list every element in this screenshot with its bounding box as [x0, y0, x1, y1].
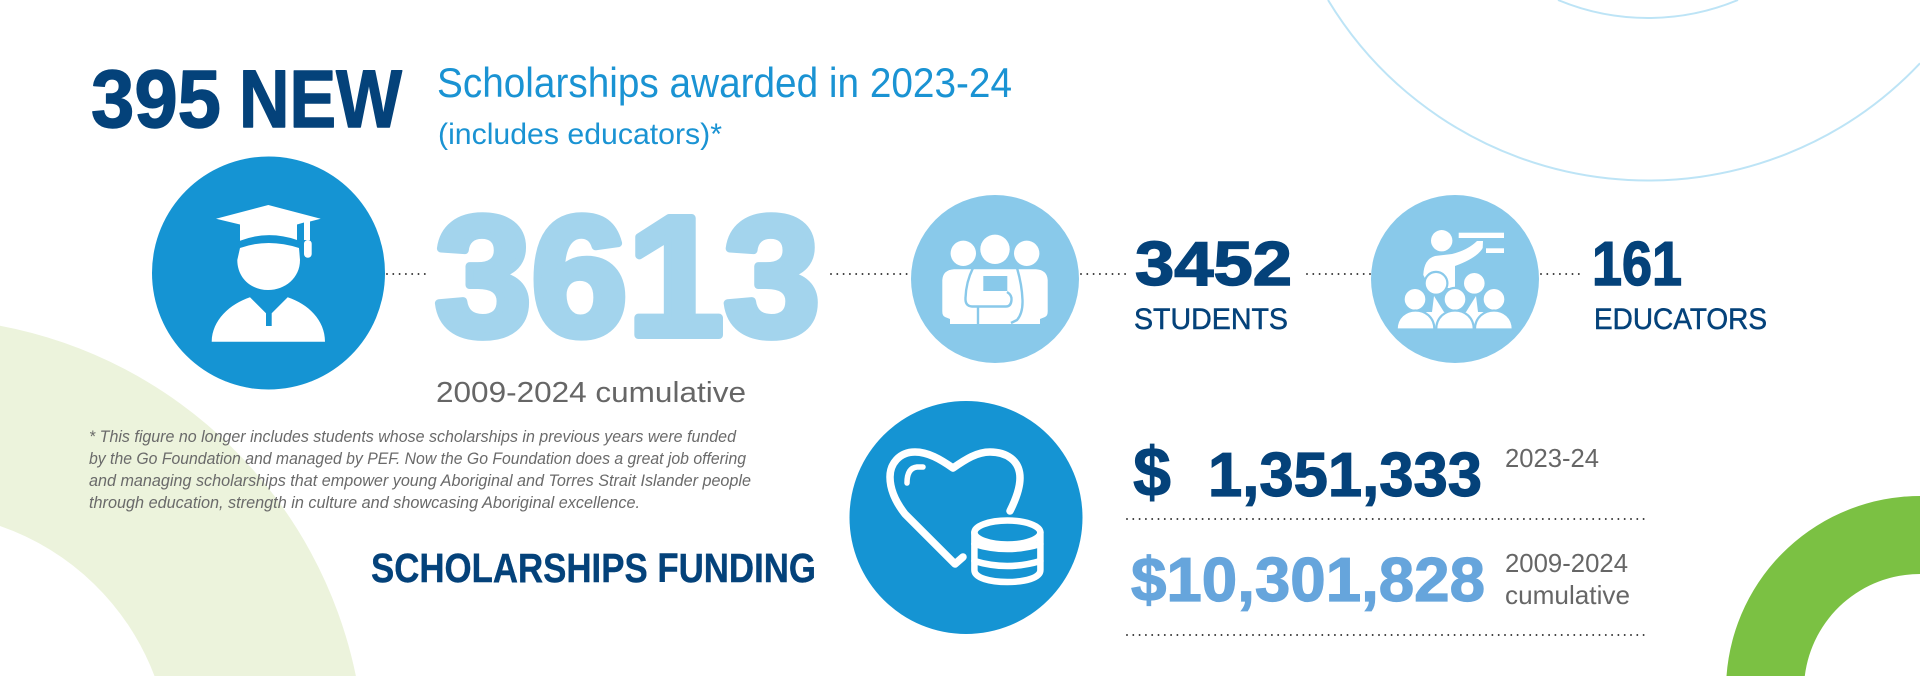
connector dots: [387, 273, 431, 275]
subheading: scholarships awarded: [437, 59, 1012, 151]
footnote: by the Go Foundation and managed by PEF. Now the Go Foundation does a great job offering: [89, 450, 747, 468]
divider dots: [1127, 518, 1648, 520]
connector dots: [1541, 273, 1582, 275]
stat: 3452 students: STUDENTS: [1134, 303, 1288, 336]
footnote: [89, 428, 751, 512]
stat: 161 educators: [1592, 230, 1767, 336]
funding figure: cumulative: cumulative: [1505, 580, 1630, 610]
caption: cumulative: 2009-2024 cumulative: [436, 377, 746, 409]
heading: 395 new: [91, 54, 403, 145]
connector dots: [1081, 273, 1130, 275]
icon: teacher and class in light blue circle: [1371, 195, 1539, 363]
stat: 3452 students: 3452: [1135, 230, 1292, 299]
icon: heart and coins in blue circle: [850, 401, 1082, 634]
subheading: scholarships awarded: (includes educators)*: [438, 118, 722, 151]
funding figure: 2023-24: [1133, 433, 1599, 511]
footnote: and managing scholarships that empower young Aboriginal and Torres Strait Islander people: [89, 472, 751, 490]
decorative pale green arc: [0, 326, 356, 676]
decorative thin blue arcs: [1328, 0, 1920, 181]
decorative green arc: [1726, 496, 1920, 676]
footnote: through education, strength in culture and showcasing Aboriginal excellence.: [89, 494, 640, 512]
icon: graduate in blue circle: [152, 156, 385, 390]
connector dots: [831, 273, 910, 275]
heading: 395 new: NEW: [239, 54, 403, 145]
subheading: scholarships awarded: Scholarships awarded in 2023-24: [437, 59, 1012, 106]
stat: 161 educators: EDUCATORS: [1594, 303, 1767, 336]
divider dots: [1127, 634, 1648, 636]
stat: 3452 students: [1134, 230, 1292, 336]
stat: 161 educators: 161: [1592, 230, 1682, 299]
footnote: * This figure no longer includes students whose scholarships in previous years were funded: [89, 428, 737, 446]
heading: scholarships funding: SCHOLARSHIPS FUNDING: [371, 545, 816, 591]
icon: students group in light blue circle: [911, 195, 1079, 363]
funding figure: 2023-24: $: [1133, 433, 1171, 511]
funding figure: cumulative: $10,301,828: [1131, 546, 1485, 615]
big number 3613: 3613: [435, 182, 820, 372]
heading: 395 new: 395: [91, 54, 221, 145]
connector dots: [1307, 273, 1371, 275]
funding figure: 2023-24: 1,351,333: [1208, 441, 1482, 510]
funding figure: cumulative: [1131, 546, 1630, 615]
funding figure: 2023-24: 2023-24: [1505, 443, 1599, 473]
funding figure: cumulative: 2009-2024: [1505, 548, 1628, 578]
